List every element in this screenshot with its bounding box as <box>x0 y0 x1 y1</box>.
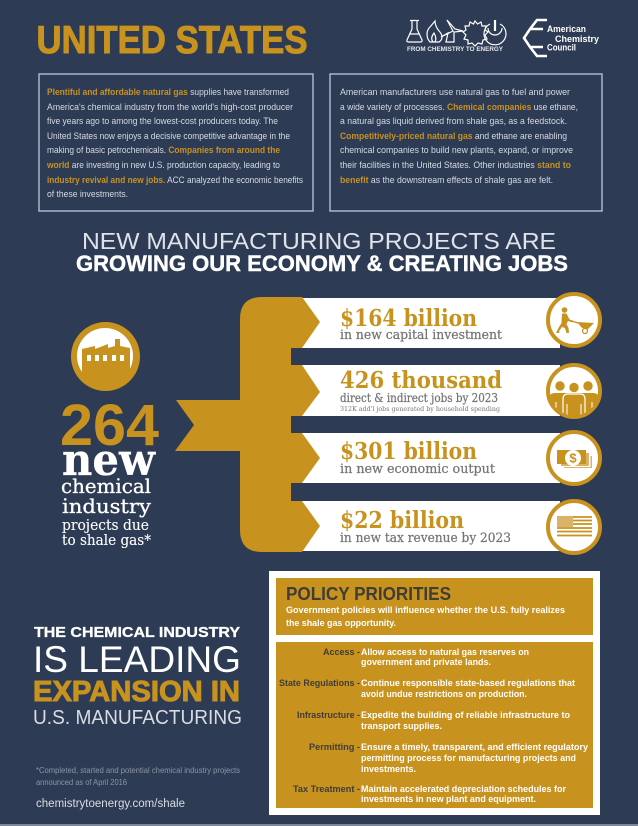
stat: tax revenue: in new tax revenue by 2023 <box>340 531 511 546</box>
stat: capital investment <box>340 305 503 343</box>
policy: infrastructure: Infrastructure - <box>297 710 360 721</box>
policy: state regulations: State Regulations - <box>279 678 360 689</box>
policy: infrastructure: Expedite the building of reliable infrastructure to <box>361 710 570 721</box>
bracket: gold connector <box>175 297 320 552</box>
icon: money stack: $ <box>569 450 577 466</box>
heading: new manufacturing projects <box>76 228 568 276</box>
panel: intro right <box>330 74 602 211</box>
icon: flag <box>548 501 600 553</box>
policy: state regulations: Continue responsible state-based regulations that <box>361 678 576 689</box>
panel: intro right: Competitively-priced natural gas and ethane are enabling <box>340 131 567 141</box>
icon: money stack <box>548 432 600 484</box>
logo text: FROM CHEMISTRY TO ENERGY <box>407 46 504 53</box>
policy: infrastructure: transport supplies. <box>361 721 442 732</box>
panel: intro right: a natural gas liquid derived from shale gas, as a feedstock. <box>340 116 567 126</box>
panel: intro left: Plentiful and affordable natural gas supplies have transformed <box>47 87 289 97</box>
text: 264 new chemical industry projects: industry <box>62 494 152 518</box>
logo: American Chemistry Council: American <box>547 24 586 35</box>
logo: American Chemistry Council <box>524 20 600 56</box>
heading: new manufacturing projects: NEW MANUFACTURING PROJECTS ARE <box>82 228 556 254</box>
logo: from chemistry to energy <box>407 20 506 46</box>
panel: intro right: their facilities in the United States. Other industries stand to <box>340 160 571 170</box>
panel: intro left: United States now enjoys a decisive competitive advantage in the <box>47 131 290 141</box>
stat: capital investment: $164 billion <box>340 305 477 332</box>
policy intro <box>286 605 565 629</box>
panel: intro left: America's chemical industry from the world's high-cost producer <box>47 102 293 112</box>
text: 264 new chemical industry projects: projects due <box>62 516 149 534</box>
title: UNITED STATES <box>36 19 308 62</box>
stat: economic output <box>340 438 496 477</box>
policy: tax treatment: investments in new plant and equipment. <box>361 794 536 805</box>
policy: permitting: investments. <box>361 764 416 775</box>
policy: tax treatment <box>293 784 566 805</box>
policy: state regulations: avoid undue restrictions on production. <box>361 689 527 700</box>
text: 264 new chemical industry projects: to shale gas* <box>62 531 151 549</box>
text: 264 new chemical industry projects: 264 <box>60 393 159 458</box>
panel: intro right: chemical companies to build new plants, expand, or improve <box>340 145 573 155</box>
panel: policy priorities <box>269 571 600 815</box>
stat: tax revenue <box>340 507 511 546</box>
policy: access <box>323 647 529 668</box>
policy: permitting: Ensure a timely, transparent, and efficient regulatory <box>361 742 589 753</box>
panel: intro left: world are investing in new U.S. production capacity, leading to <box>46 160 280 170</box>
policy: access: government and private lands. <box>361 657 491 668</box>
stat: jobs: direct & indirect jobs by 2023 <box>340 391 498 405</box>
policy: infrastructure <box>297 710 570 732</box>
logo: American Chemistry Council: Council <box>547 42 576 54</box>
policy intro: the shale gas opportunity. <box>286 618 396 629</box>
url: chemistrytoenergy.com/shale <box>36 798 185 810</box>
stat: tax revenue: $22 billion <box>340 507 464 534</box>
policy: access: Allow access to natural gas reserves on <box>361 647 529 658</box>
heading: chemical industry is leading <box>33 624 242 729</box>
icon: wheelbarrow worker <box>548 294 600 346</box>
policy: permitting: Permitting - <box>309 742 360 753</box>
stat: jobs <box>340 367 502 413</box>
policy: tax treatment: Maintain accelerated depreciation schedules for <box>361 784 566 795</box>
logo: American Chemistry Council: Chemistry <box>555 34 600 45</box>
text: 264 new chemical industry projects <box>60 393 159 549</box>
footnote: announced as of April 2016 <box>36 777 127 787</box>
panel: intro right: a wide variety of processes. Chemical companies use ethane, <box>340 102 578 112</box>
stat: economic output: in new economic output <box>340 462 496 477</box>
heading: chemical industry is leading: EXPANSION IN <box>33 676 240 708</box>
stat: jobs: 426 thousand <box>340 367 502 394</box>
policy heading: POLICY PRIORITIES <box>286 583 451 604</box>
stat: economic output: $301 billion <box>340 438 477 465</box>
policy: permitting: permitting process for manufacturing projects and <box>361 753 576 764</box>
policy: tax treatment: Tax Treatment - <box>293 784 360 795</box>
heading: chemical industry is leading: IS LEADING <box>33 638 241 680</box>
panel: intro left: of these investments. <box>47 189 128 199</box>
panel: intro left: industry revival and new jobs. ACC analyzed the economic benefits <box>47 175 303 185</box>
heading: new manufacturing projects: GROWING OUR ECONOMY & CREATING JOBS <box>76 251 568 276</box>
footnote <box>36 765 240 787</box>
policy intro: Government policies will influence whether the U.S. fully realizes <box>286 605 565 616</box>
policy: access: Access - <box>323 647 360 658</box>
stat: capital investment: in new capital investment <box>340 328 503 343</box>
footnote: *Completed, started and potential chemical industry projects <box>36 765 240 775</box>
policy: permitting <box>309 742 589 775</box>
icon: people <box>548 365 600 418</box>
heading: chemical industry is leading: THE CHEMICAL INDUSTRY <box>34 624 240 641</box>
panel: intro right: American manufacturers use natural gas to fuel and power <box>340 87 570 97</box>
policy: state regulations <box>279 678 576 700</box>
panel: intro left <box>39 74 313 211</box>
panel: intro right: benefit as the downstream effects of shale gas are felt. <box>340 175 553 185</box>
text: 264 new chemical industry projects: chemical <box>61 474 151 498</box>
panel: intro left: making of basic petrochemicals. Companies from around the <box>47 145 280 155</box>
panel: intro left: five years ago to among the lowest-cost producers today. The <box>47 116 278 126</box>
icon: factory <box>71 322 140 391</box>
panel: white stat bars <box>295 298 560 551</box>
heading: chemical industry is leading: U.S. MANUFACTURING <box>33 707 242 729</box>
stat: jobs: 312K add'l jobs generated by household spending <box>340 406 500 413</box>
text: 264 new chemical industry projects: new <box>62 435 156 486</box>
